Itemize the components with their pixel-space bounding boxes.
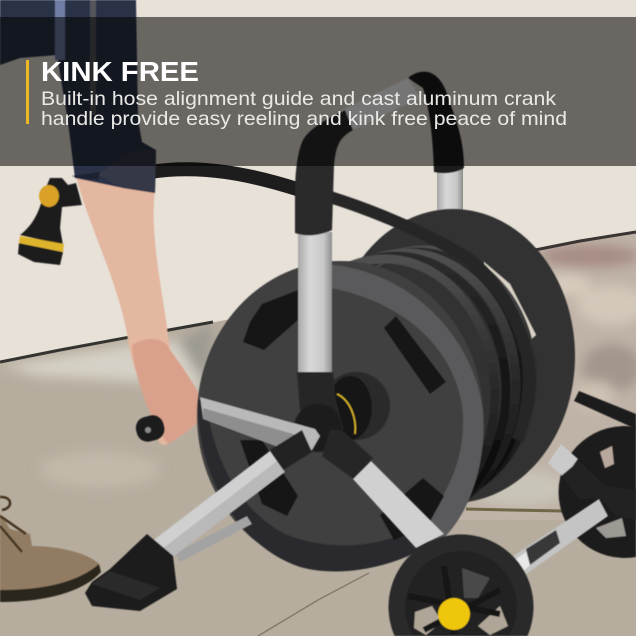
disk slots — [240, 290, 446, 540]
heading: KINK FREE — [41, 56, 199, 87]
body text — [41, 88, 567, 130]
banner: translucent dark strip — [0, 17, 636, 166]
crank handle — [134, 397, 373, 480]
reel: front disk — [197, 261, 484, 571]
foot pad — [85, 534, 177, 611]
front wheel — [389, 534, 533, 636]
reel hub — [322, 372, 390, 440]
spray nozzle — [18, 178, 82, 265]
background: wall, sidewalk and pavers — [0, 230, 636, 636]
body text: Built-in hose alignment guide and cast aluminum crank — [41, 88, 556, 110]
hose coming out of sleeve to the reel — [150, 169, 300, 190]
back wheel — [559, 426, 636, 558]
accent bar — [26, 60, 29, 124]
second aluminum upright — [437, 165, 463, 220]
reel: back disk — [331, 209, 575, 503]
body text: handle provide easy reeling and kink free peace of mind — [41, 108, 567, 130]
boot — [0, 497, 101, 602]
hose coils on the reel — [275, 197, 532, 531]
rear leg and collar — [509, 444, 636, 579]
legs — [150, 391, 636, 562]
handle frame: upright, grip and top bar — [295, 72, 464, 430]
person: shirt, arm and hand — [0, 0, 205, 445]
